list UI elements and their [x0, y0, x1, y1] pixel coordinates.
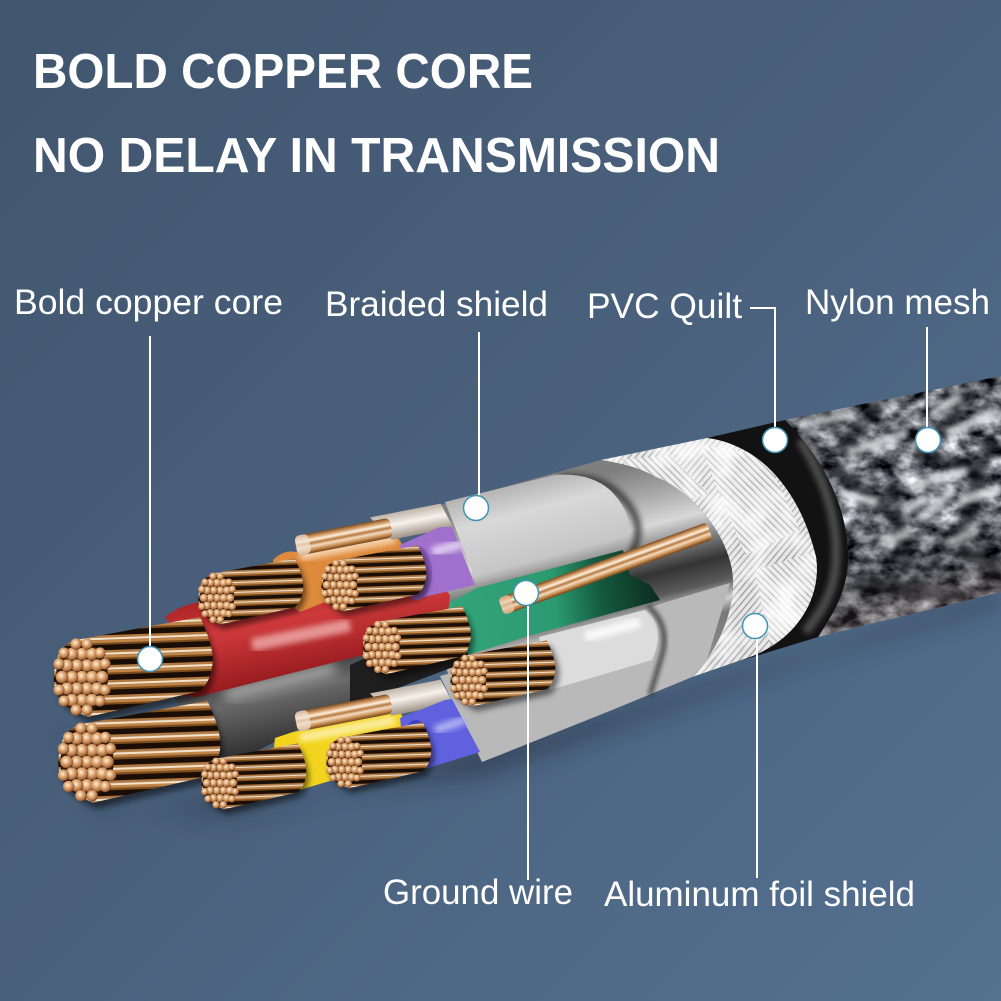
label: Ground wire: Ground wire — [383, 873, 573, 912]
title: NO DELAY IN TRANSMISSION — [33, 129, 720, 183]
inner light tube — [539, 610, 658, 690]
blue insulated wire — [400, 699, 480, 772]
inner silver lining — [420, 460, 733, 762]
label: Nylon mesh — [805, 283, 990, 452]
PVC quilt black band — [707, 420, 848, 660]
label: Bold copper core — [14, 283, 283, 672]
nylon mesh jacket — [780, 370, 1001, 645]
copper bundle shadows — [57, 550, 559, 814]
label: Aluminum foil shield — [604, 614, 915, 914]
title: BOLD COPPER CORE — [33, 45, 533, 99]
label: Ground wire — [383, 580, 573, 912]
aluminum foil shield ring — [601, 438, 817, 677]
label: Aluminum foil shield: Aluminum foil shield — [604, 875, 915, 914]
bottom ground wire — [293, 678, 453, 734]
label: Braided shield: Braided shield — [325, 285, 548, 324]
purple insulated wire — [400, 527, 475, 600]
red insulated wire — [165, 560, 450, 697]
cable drop shadow — [60, 592, 1001, 815]
copper strand bundles — [53, 545, 555, 809]
top ground wire — [293, 502, 453, 558]
cable illustration — [53, 370, 1001, 814]
black insulated wire — [173, 620, 472, 768]
green insulated wire — [438, 550, 660, 660]
shadow behind braided shield tube — [560, 478, 638, 556]
ground wire — [498, 522, 713, 615]
label: PVC Quilt — [587, 287, 788, 452]
label: Nylon mesh: Nylon mesh — [805, 283, 990, 322]
yellow insulated wire — [274, 712, 415, 792]
label: Bold copper core: Bold copper core — [14, 283, 283, 322]
lower braided shield — [440, 583, 730, 762]
braided shield upper tube — [445, 475, 629, 583]
title — [33, 45, 720, 183]
label: Braided shield — [325, 285, 548, 520]
orange insulated wire — [273, 533, 412, 612]
label: PVC Quilt: PVC Quilt — [587, 287, 742, 326]
